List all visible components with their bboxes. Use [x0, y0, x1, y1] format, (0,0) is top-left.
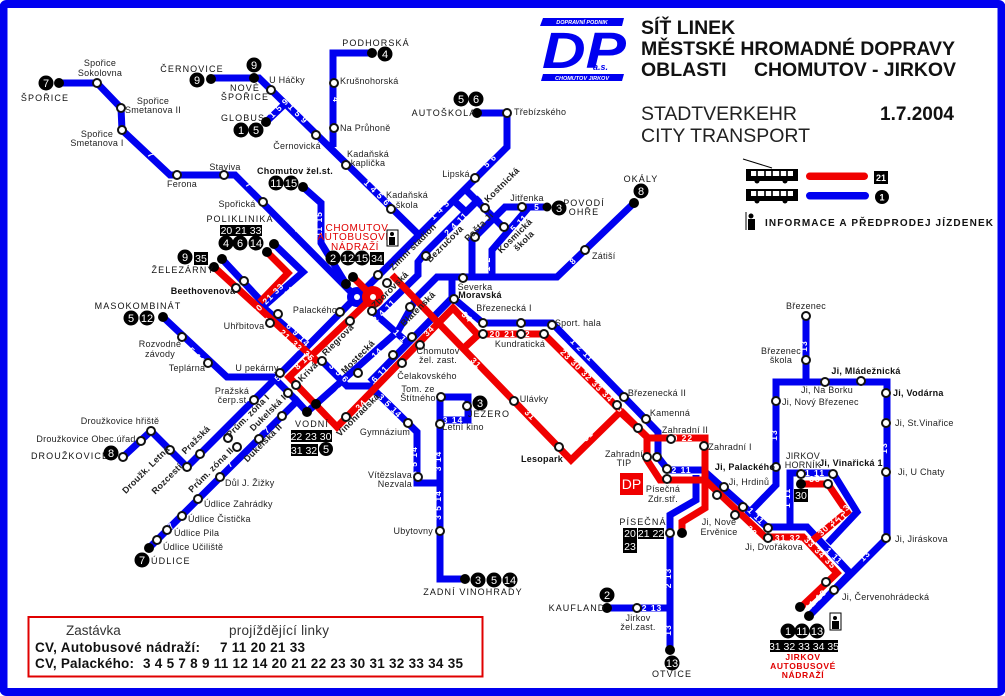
- line numbers on routes: 23 30 32 33 34 35: [558, 347, 626, 415]
- round line number badges: 5: [491, 575, 497, 587]
- line numbers on routes: 20: [261, 315, 276, 330]
- station labels: U Háčky: [269, 75, 305, 85]
- stop lines table: [28, 617, 482, 676]
- station labels: Krušnohorská: [340, 76, 399, 86]
- DP logo: DP: [542, 22, 627, 79]
- line numbers on routes: 4: [331, 97, 341, 103]
- round line number badges: 5: [128, 313, 134, 325]
- legend: [743, 159, 994, 230]
- station labels: Údlice Pila: [174, 528, 219, 538]
- line numbers on routes: 8: [567, 255, 578, 266]
- station labels: Ji, Červenohrádecká: [842, 592, 929, 602]
- line numbers on routes: 1 5 9: [267, 96, 291, 120]
- station labels: Černovická: [273, 141, 321, 151]
- red DP sign: DP: [622, 476, 641, 492]
- icon: information desk, Chomutov: [387, 230, 398, 246]
- stop lines table: CV, Autobusové nádraží:: [35, 640, 200, 655]
- station labels: DROUŽKOVICE: [31, 451, 109, 461]
- round line number badges: 14: [250, 238, 262, 250]
- station labels: Ji, Palackého: [715, 462, 775, 472]
- line numbers on routes: 1 2: [482, 257, 492, 271]
- line numbers on routes: 6 9 14: [284, 321, 312, 349]
- stops: [93, 79, 890, 612]
- line numbers on routes: 20 21 22: [489, 329, 531, 339]
- line numbers on routes: 1 5 9: [286, 102, 310, 126]
- station labels: Chomutov: [416, 346, 460, 356]
- line numbers on routes: 33: [290, 338, 305, 353]
- station labels: žel. zast.: [419, 355, 457, 365]
- line numbers on routes: 1 11: [805, 468, 825, 478]
- station labels: JEZERO: [468, 409, 510, 419]
- station labels: Droužkovice Obec.úřad: [36, 434, 136, 444]
- line numbers on routes: 7: [293, 224, 304, 235]
- station labels: Rozvodné: [139, 339, 181, 349]
- round line number badges: 3: [556, 203, 562, 215]
- station labels: Severka: [458, 282, 492, 292]
- station labels: JIRKOV: [786, 451, 820, 461]
- station labels: Čelakovského: [397, 371, 457, 381]
- round line number badges: 12: [141, 313, 153, 325]
- station labels: Moravská: [458, 290, 503, 300]
- station labels: ŠPOŘICE: [21, 93, 69, 103]
- round line number badges: 6: [473, 94, 479, 106]
- station labels: Lipská: [442, 169, 470, 179]
- round line number badges: 9: [194, 75, 200, 87]
- station labels: žel.zast.: [620, 622, 656, 632]
- round line number badges: 2: [604, 590, 610, 602]
- line numbers on routes: 2 13: [663, 568, 673, 588]
- line numbers on routes: 7: [165, 520, 176, 531]
- station labels: Gymnázium: [360, 427, 410, 437]
- station labels: Jirkov: [625, 613, 651, 623]
- station labels: ŠPOŘICE: [221, 92, 269, 102]
- square line number badges: 30: [795, 490, 807, 502]
- line numbers on routes: 13: [663, 624, 673, 636]
- line numbers on routes: 3 5 14: [409, 446, 419, 476]
- station labels: Rozcestí: [150, 461, 184, 496]
- station labels: Zahradní II: [662, 425, 708, 435]
- line numbers on routes: 13: [799, 340, 809, 352]
- subtitle: CITY TRANSPORT: [641, 125, 810, 147]
- terminal name: Chomutov autobusové nádraží: [317, 223, 393, 253]
- red DP sign: [620, 473, 643, 495]
- station labels: Na Průhoně: [340, 123, 391, 133]
- station labels: Ji, Nové: [702, 517, 736, 527]
- line numbers on routes: 1 4 5 6: [362, 178, 392, 208]
- terminal name: Jirkov autobusové nádraží: NÁDRAŽÍ: [782, 669, 824, 680]
- round line number badges: 1: [785, 626, 791, 638]
- line numbers on routes: 7: [244, 179, 255, 190]
- line numbers on routes: 6: [433, 292, 444, 303]
- round line number badges: 4: [382, 49, 388, 61]
- round line number badges: 15: [356, 253, 368, 265]
- title: [641, 15, 956, 81]
- station labels: Písečná: [646, 484, 680, 494]
- station labels: Krivá: [296, 359, 320, 384]
- square line number badges: 20: [624, 528, 636, 540]
- station labels: Beethovenova: [171, 286, 236, 296]
- station labels: Zdr.stř.: [648, 494, 678, 504]
- station labels: TIP: [617, 458, 631, 468]
- line numbers on routes: 3 5 14: [433, 490, 443, 520]
- station labels: Ulávky: [520, 394, 548, 404]
- round line number badges: 9: [251, 60, 257, 72]
- round line number badges: 5: [323, 444, 329, 456]
- station labels: Ji, Vinařická 1: [819, 458, 883, 468]
- line numbers on routes: 3 5 14: [376, 392, 404, 420]
- station labels: OTVICE: [652, 669, 692, 679]
- terminal name: Chomutov autobusové nádraží: NÁDRAŽÍ: [331, 240, 379, 253]
- station labels: Uhřbitova: [224, 321, 264, 331]
- red network lines: [214, 252, 847, 608]
- station labels: Kundratická: [495, 339, 545, 349]
- station labels: Zahradní: [605, 449, 643, 459]
- station labels: PÍSEČNÁ: [619, 517, 667, 527]
- line numbers on routes: 20 21 33: [250, 281, 286, 317]
- round line number badges: 6: [237, 238, 243, 250]
- station labels: Ji, St.Vinařice: [895, 418, 954, 428]
- line numbers on routes: 1 11: [823, 545, 845, 567]
- line numbers on routes: 34: [353, 397, 368, 412]
- station labels: závody: [145, 349, 175, 359]
- round line number badges: 14: [504, 575, 516, 587]
- line numbers on routes: [146, 96, 889, 636]
- round line number badges: 7: [43, 78, 49, 90]
- subtitle: STADTVERKEHR: [641, 103, 797, 125]
- station labels: Sport. hala: [555, 318, 601, 328]
- square line number badges: 35: [195, 253, 207, 265]
- station labels: Březenec: [761, 346, 801, 356]
- stop lines table: CV, Palackého:: [35, 656, 134, 671]
- line numbers on routes: 1 11: [782, 488, 792, 508]
- station labels: Ji, Jiráskova: [895, 534, 948, 544]
- round line number badges: 5: [458, 94, 464, 106]
- terminal name: Chomutov autobusové nádraží: CHOMUTOV: [326, 223, 388, 234]
- terminal name: Jirkov autobusové nádraží: AUTOBUSOVÉ: [770, 661, 836, 671]
- round line number badges: [38, 46, 824, 670]
- DP logo: CHOMUTOV JIRKOV: [555, 76, 610, 82]
- title: MĚSTSKÉ HROMADNÉ DOPRAVY: [641, 36, 955, 60]
- station labels: GLOBUS: [221, 113, 265, 123]
- line numbers on routes: 11 15: [314, 211, 324, 237]
- station labels: Tom. ze: [401, 384, 435, 394]
- line numbers on routes: 1 11: [745, 505, 767, 527]
- round line number badges: 1: [238, 125, 244, 137]
- station labels: Pošta Ji: [462, 210, 495, 243]
- station labels: Staviva: [209, 162, 241, 172]
- station labels: Ji, Na Borku: [801, 385, 853, 395]
- station labels: ZADNÍ VINOHRADY: [423, 587, 523, 597]
- line numbers on routes: 31: [580, 428, 595, 443]
- station labels: POLIKLINIKA: [206, 214, 274, 224]
- line numbers on routes: 8 12: [292, 350, 314, 372]
- station labels: Ji, Dvořákova: [745, 542, 803, 552]
- line numbers on routes: 3 6: [481, 225, 499, 243]
- line numbers on routes: 34: [460, 309, 475, 324]
- round line number badges: 3: [477, 398, 483, 410]
- square line number badges: 21 22: [638, 528, 664, 540]
- stop lines table: 7 11 20 21 33: [220, 640, 305, 655]
- square line number badges: 23: [624, 541, 636, 553]
- station labels: Spořice: [81, 129, 113, 139]
- stop lines table: projíždějící linky: [229, 623, 329, 638]
- date: 1.7.2004: [880, 104, 954, 125]
- station labels: Pražská: [215, 386, 249, 396]
- line numbers on routes: 1 2 11: [662, 465, 692, 475]
- line numbers on routes: 8: [383, 250, 394, 261]
- line numbers on routes: 8: [242, 392, 253, 403]
- station labels: Smetanova I: [70, 138, 124, 148]
- station labels: Dukelská II: [242, 422, 284, 464]
- station labels: Březenecká I: [476, 303, 532, 313]
- station labels: Údlice Čistička: [188, 514, 251, 524]
- station labels: kaplička: [351, 158, 385, 168]
- line numbers on routes: 5 12: [186, 345, 208, 367]
- round line number badges: 11: [796, 626, 808, 638]
- station labels: Vinohradská: [334, 391, 382, 438]
- station labels: Březenec: [786, 301, 826, 311]
- station labels: Smetanova II: [125, 105, 181, 115]
- legend: 1: [879, 192, 885, 202]
- line numbers on routes: 3 14: [433, 451, 443, 471]
- station labels: Ji, Mládežnická: [831, 366, 901, 376]
- station labels: škola: [396, 200, 418, 210]
- station labels: Ji, U Chaty: [898, 467, 945, 477]
- station labels: Teplárna: [169, 363, 205, 373]
- round line number badges: 12: [342, 253, 354, 265]
- square line number badges: [194, 225, 839, 653]
- terminal name: Jirkov autobusové nádraží: [770, 652, 836, 680]
- station labels: U pekárny: [235, 363, 279, 373]
- station labels: Třebízského: [514, 107, 566, 117]
- station labels: Lesopark: [521, 454, 564, 464]
- stop lines table: 3 4 5 7 8 9 11 12 14 20 21 22 23 30 31 32 33 34 35: [143, 656, 463, 671]
- station labels: Zimní stadion: [388, 222, 438, 272]
- station labels: Palackého: [293, 305, 337, 315]
- DP logo: DOPRAVNÍ PODNIK: [556, 19, 609, 26]
- title: OBLASTI: [641, 59, 727, 81]
- square line number badges: 31 32 33 34 35: [769, 641, 839, 653]
- line numbers on routes: 35: [809, 474, 821, 484]
- station labels: Kadaňská: [386, 190, 428, 200]
- station labels: KAUFLAND: [549, 603, 605, 613]
- hub: blue star: [347, 287, 367, 307]
- line numbers on routes: 5: [534, 202, 540, 212]
- legend: INFORMACE A PŘEDPRODEJ JÍZDENEK: [765, 216, 994, 229]
- line numbers on routes: 7: [146, 149, 157, 160]
- blue network lines: [59, 53, 887, 650]
- station labels: Pražská: [180, 423, 213, 456]
- station labels: Zborovská: [369, 269, 411, 310]
- station labels: Letní kino: [442, 422, 484, 432]
- station labels: ČERNOVICE: [160, 64, 224, 74]
- station labels: Riegrova: [320, 321, 356, 358]
- icon: information desk, Jirkov: [830, 613, 841, 630]
- square line number badges: 31 32: [291, 445, 317, 457]
- line numbers on routes: 5 11: [508, 212, 530, 234]
- station labels: Kostnická: [482, 165, 522, 204]
- station labels: Vítězslava: [368, 470, 412, 480]
- station labels: MASOKOMBINÁT: [95, 301, 181, 311]
- line numbers on routes: 2 4 11: [370, 297, 398, 325]
- station labels: škola: [512, 228, 537, 253]
- station labels: Mostecká: [339, 338, 377, 376]
- square line number badges: 22 23 30: [291, 431, 332, 443]
- station labels: Chomutov žel.st.: [257, 166, 333, 176]
- station labels: Droužk. Letná: [120, 444, 172, 496]
- line numbers on routes: 30 32 33: [816, 502, 852, 538]
- round line number badges: 9: [182, 252, 188, 264]
- line numbers on routes: 8: [203, 429, 214, 440]
- station labels: Spořická: [218, 199, 256, 209]
- station labels: Droužkovice hřiště: [81, 416, 159, 426]
- line numbers on routes: 13: [879, 442, 889, 454]
- line numbers on routes: 3 14: [443, 415, 463, 425]
- line numbers on routes: 34: [421, 323, 436, 338]
- station labels: Zahradní I: [708, 442, 752, 452]
- hub: red star: [362, 286, 384, 308]
- line numbers on routes: 1 2 11: [568, 336, 596, 364]
- line numbers on routes: 7: [224, 458, 235, 469]
- line numbers on routes: 31: [523, 407, 538, 422]
- station labels: Prům. zóna I: [224, 392, 271, 439]
- round line number badges: 7: [139, 555, 145, 567]
- line numbers on routes: 4 6 14: [269, 284, 297, 312]
- station labels: Spořice: [84, 58, 116, 68]
- station labels: AUTOŠKOLA: [412, 108, 476, 118]
- station labels: čerp.st: [218, 395, 247, 405]
- line numbers on routes: 11 13: [803, 587, 829, 613]
- round line number badges: 4: [223, 238, 229, 250]
- terminal name: Chomutov autobusové nádraží: AUTOBUSOVÉ: [317, 230, 393, 243]
- station labels: Ji, Nový Březenec: [782, 397, 859, 407]
- station labels: Sokolovna: [78, 68, 122, 78]
- line numbers on routes: 21: [278, 327, 293, 342]
- round line number badges: 13: [666, 658, 678, 670]
- line numbers on routes: 30: [745, 523, 760, 538]
- round line number badges: 8: [638, 186, 644, 198]
- round line number badges: 15: [285, 178, 297, 190]
- square line number badges: 34: [371, 253, 383, 265]
- station labels: OKÁLY: [624, 174, 658, 184]
- line numbers on routes: 1 1: [391, 327, 409, 345]
- line numbers on routes: 20 22: [667, 433, 693, 443]
- station labels: ÚDLICE: [151, 556, 191, 566]
- line numbers on routes: 7: [261, 424, 272, 435]
- station labels: Kadaňská: [347, 149, 389, 159]
- round line number badges: 3: [475, 575, 481, 587]
- station labels: HORNÍK: [785, 460, 821, 470]
- line numbers on routes: 35: [235, 306, 250, 321]
- station labels: Ubytovny: [393, 526, 433, 536]
- station labels: Blatenská: [399, 289, 438, 328]
- round line number badges: 11: [270, 178, 282, 190]
- station labels: Kosmická: [496, 216, 535, 255]
- station labels: Ji, Hrdinů: [729, 477, 769, 487]
- subtitle: [641, 103, 810, 147]
- station labels: Zátiší: [592, 251, 616, 261]
- line numbers on routes: 13: [769, 429, 779, 441]
- line numbers on routes: 31 32: [775, 533, 801, 543]
- line numbers on routes: 5: [272, 372, 283, 383]
- line numbers on routes: 2 4 11: [442, 210, 470, 238]
- round line number badges: 8: [108, 448, 114, 460]
- title: CHOMUTOV - JIRKOV: [754, 59, 956, 81]
- station labels: Ji, Vodárna: [893, 388, 944, 398]
- station labels: Spořice: [137, 96, 169, 106]
- line numbers on routes: 33 34 35: [802, 535, 838, 571]
- station labels: POVODÍ: [563, 198, 605, 208]
- station labels: NOVÉ: [230, 83, 260, 93]
- line numbers on routes: 14: [369, 345, 384, 360]
- station labels: Ferona: [167, 179, 197, 189]
- station labels: škola: [770, 355, 792, 365]
- DP logo: a.s.: [593, 62, 608, 72]
- legend: 21: [876, 173, 886, 183]
- line numbers on routes: 5 6: [481, 152, 499, 170]
- stop lines table: Zastávka: [66, 623, 121, 638]
- station labels: Březenecká II: [628, 388, 686, 398]
- station labels: Prům. zóna II: [186, 445, 235, 494]
- line numbers on routes: 2 13: [642, 603, 662, 613]
- line numbers on routes: 6 7: [328, 385, 346, 403]
- station labels: OHŘE: [569, 207, 599, 217]
- line numbers on routes: 1 4 5: [428, 198, 452, 222]
- station labels: Jitřenka: [510, 193, 544, 203]
- line numbers on routes: 6 11: [369, 363, 391, 385]
- station labels: Nezvala: [378, 479, 412, 489]
- line numbers on routes: 35: [302, 348, 317, 363]
- station labels: Ervěnice: [700, 527, 738, 537]
- round line number badges: 13: [811, 626, 823, 638]
- station labels: PODHORSKÁ: [342, 38, 410, 48]
- station labels: Důl J. Žižky: [225, 478, 275, 488]
- round line number badges: 2: [330, 253, 336, 265]
- station labels: Údlice Učiliště: [163, 542, 223, 552]
- station labels: Kamenná: [650, 408, 690, 418]
- square line number badges: 20 21 33: [221, 225, 262, 237]
- station labels: ŽELEZÁRNY: [152, 265, 214, 275]
- title: SÍŤ LINEK: [641, 15, 735, 39]
- station labels: VODNÍ: [295, 419, 329, 429]
- round line number badges: 5: [253, 125, 259, 137]
- station labels: Štítného: [400, 393, 436, 403]
- station labels: Údlice Zahrádky: [204, 499, 273, 509]
- station labels: Bezručova: [424, 223, 466, 264]
- line numbers on routes: 1 11: [828, 510, 850, 532]
- line numbers on routes: 31: [469, 355, 484, 370]
- station labels: Dukelská I: [248, 393, 288, 433]
- line numbers on routes: 3 5 6: [327, 361, 351, 385]
- line numbers on routes: 13: [857, 548, 872, 563]
- terminal dots: [54, 48, 814, 655]
- terminal name: Jirkov autobusové nádraží: JIRKOV: [785, 652, 821, 662]
